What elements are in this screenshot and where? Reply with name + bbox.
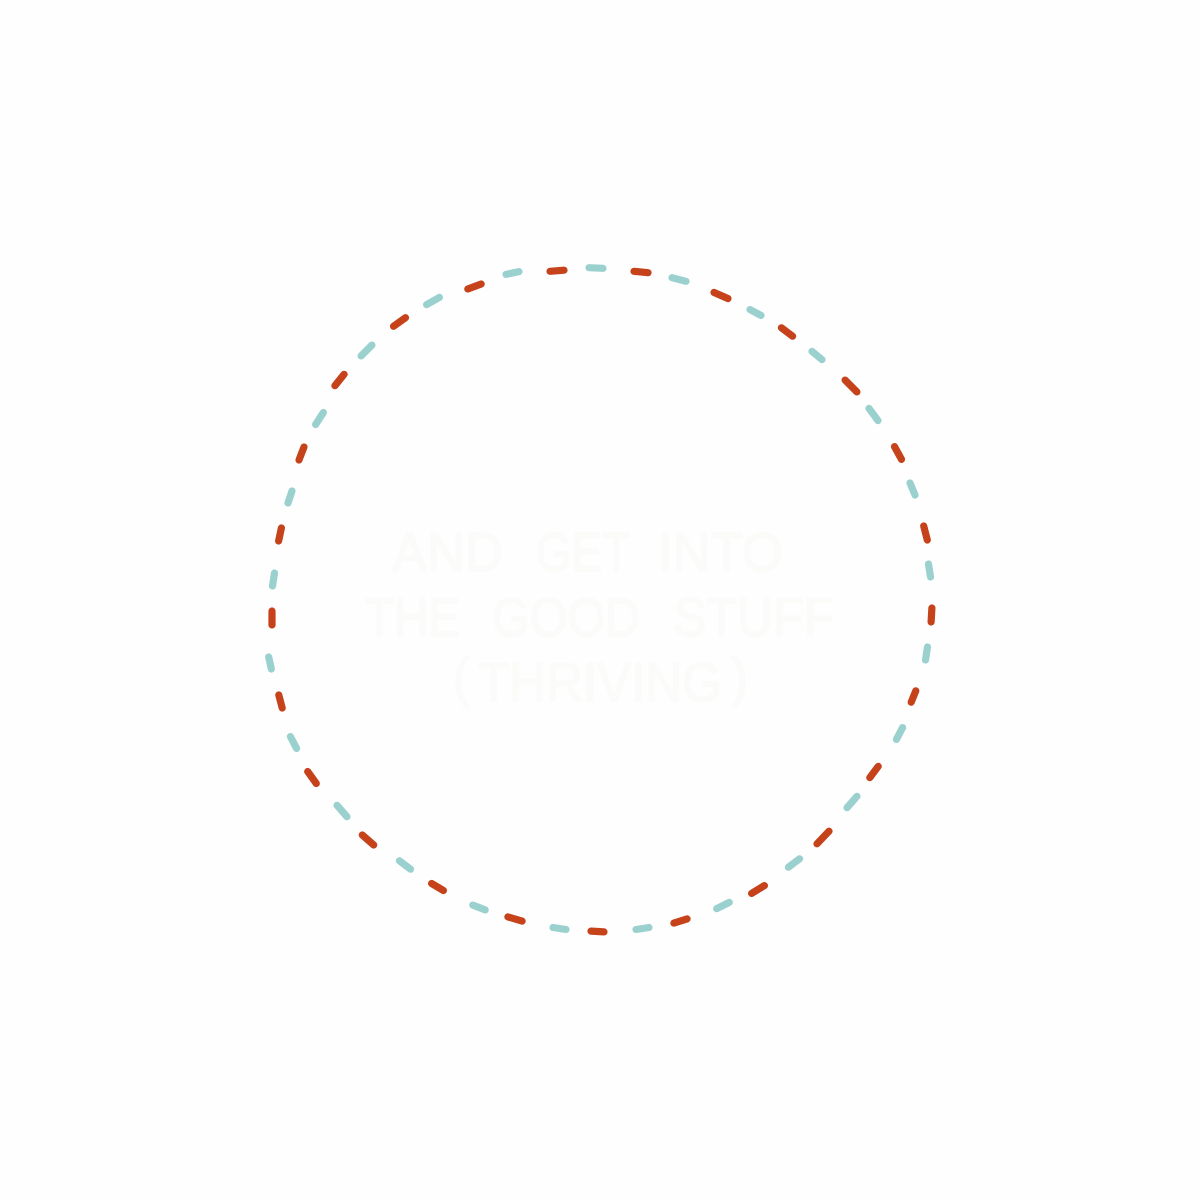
message text: GET — [536, 521, 630, 583]
message text: AND — [392, 521, 503, 583]
message text: STUFF — [673, 586, 834, 648]
message text: THE — [365, 586, 460, 648]
message text: INTO — [658, 521, 783, 583]
dashed ring: teal segments — [269, 268, 930, 930]
message text: GOOD — [492, 586, 640, 648]
dashed ring: red segments — [272, 270, 932, 932]
message text — [365, 521, 834, 713]
message text: THRIVING — [478, 651, 722, 713]
message text: ) — [731, 646, 748, 708]
message text: ( — [453, 646, 470, 708]
